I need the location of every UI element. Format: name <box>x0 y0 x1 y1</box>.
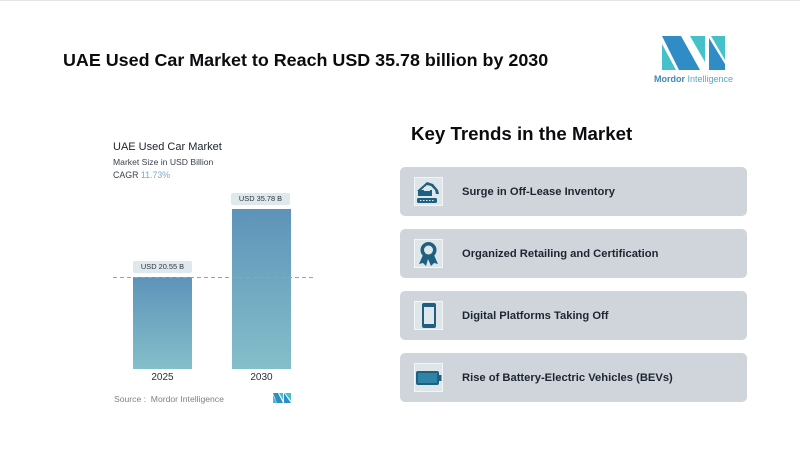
title: UAE Used Car Market to Reach USD 35.78 billion by 2030 <box>63 50 548 70</box>
logo: Mordor Intelligence: Mordor Intelligence <box>654 74 733 84</box>
value label 2025: USD 20.55 B <box>141 262 184 271</box>
chart heading: UAE Used Car Market <box>113 141 222 153</box>
card: organized retailing <box>400 229 747 278</box>
small logo <box>273 393 291 403</box>
value label 2030: USD 35.78 B <box>239 194 282 203</box>
icon: award ribbon <box>414 239 443 268</box>
bar: 2025 <box>133 277 192 369</box>
label: Organized Retailing and Certification <box>462 248 658 260</box>
axis label 2030: 2030 <box>250 372 273 383</box>
card: battery electric <box>400 353 747 402</box>
axis label 2025: 2025 <box>151 372 174 383</box>
card: digital platforms <box>400 291 747 340</box>
key trends heading: Key Trends in the Market <box>411 123 632 144</box>
CAGR label: CAGR 11.73% <box>113 170 170 180</box>
icon: battery <box>414 363 443 392</box>
value label 2030 <box>231 193 290 205</box>
label: Surge in Off-Lease Inventory <box>462 186 615 198</box>
source note: Source : Mordor Intelligence <box>114 394 224 404</box>
card: off-lease inventory <box>400 167 747 216</box>
value label 2025 <box>133 261 192 273</box>
label: Digital Platforms Taking Off <box>462 310 608 322</box>
icon: smartphone <box>414 301 443 330</box>
chart subtitle: Market Size in USD Billion <box>113 157 213 167</box>
label: Rise of Battery-Electric Vehicles (BEVs) <box>462 372 673 384</box>
bar chart <box>113 193 313 383</box>
bar: 2030 <box>232 209 291 369</box>
icon: excavator <box>414 177 443 206</box>
logo: Mordor Intelligence <box>654 36 733 84</box>
